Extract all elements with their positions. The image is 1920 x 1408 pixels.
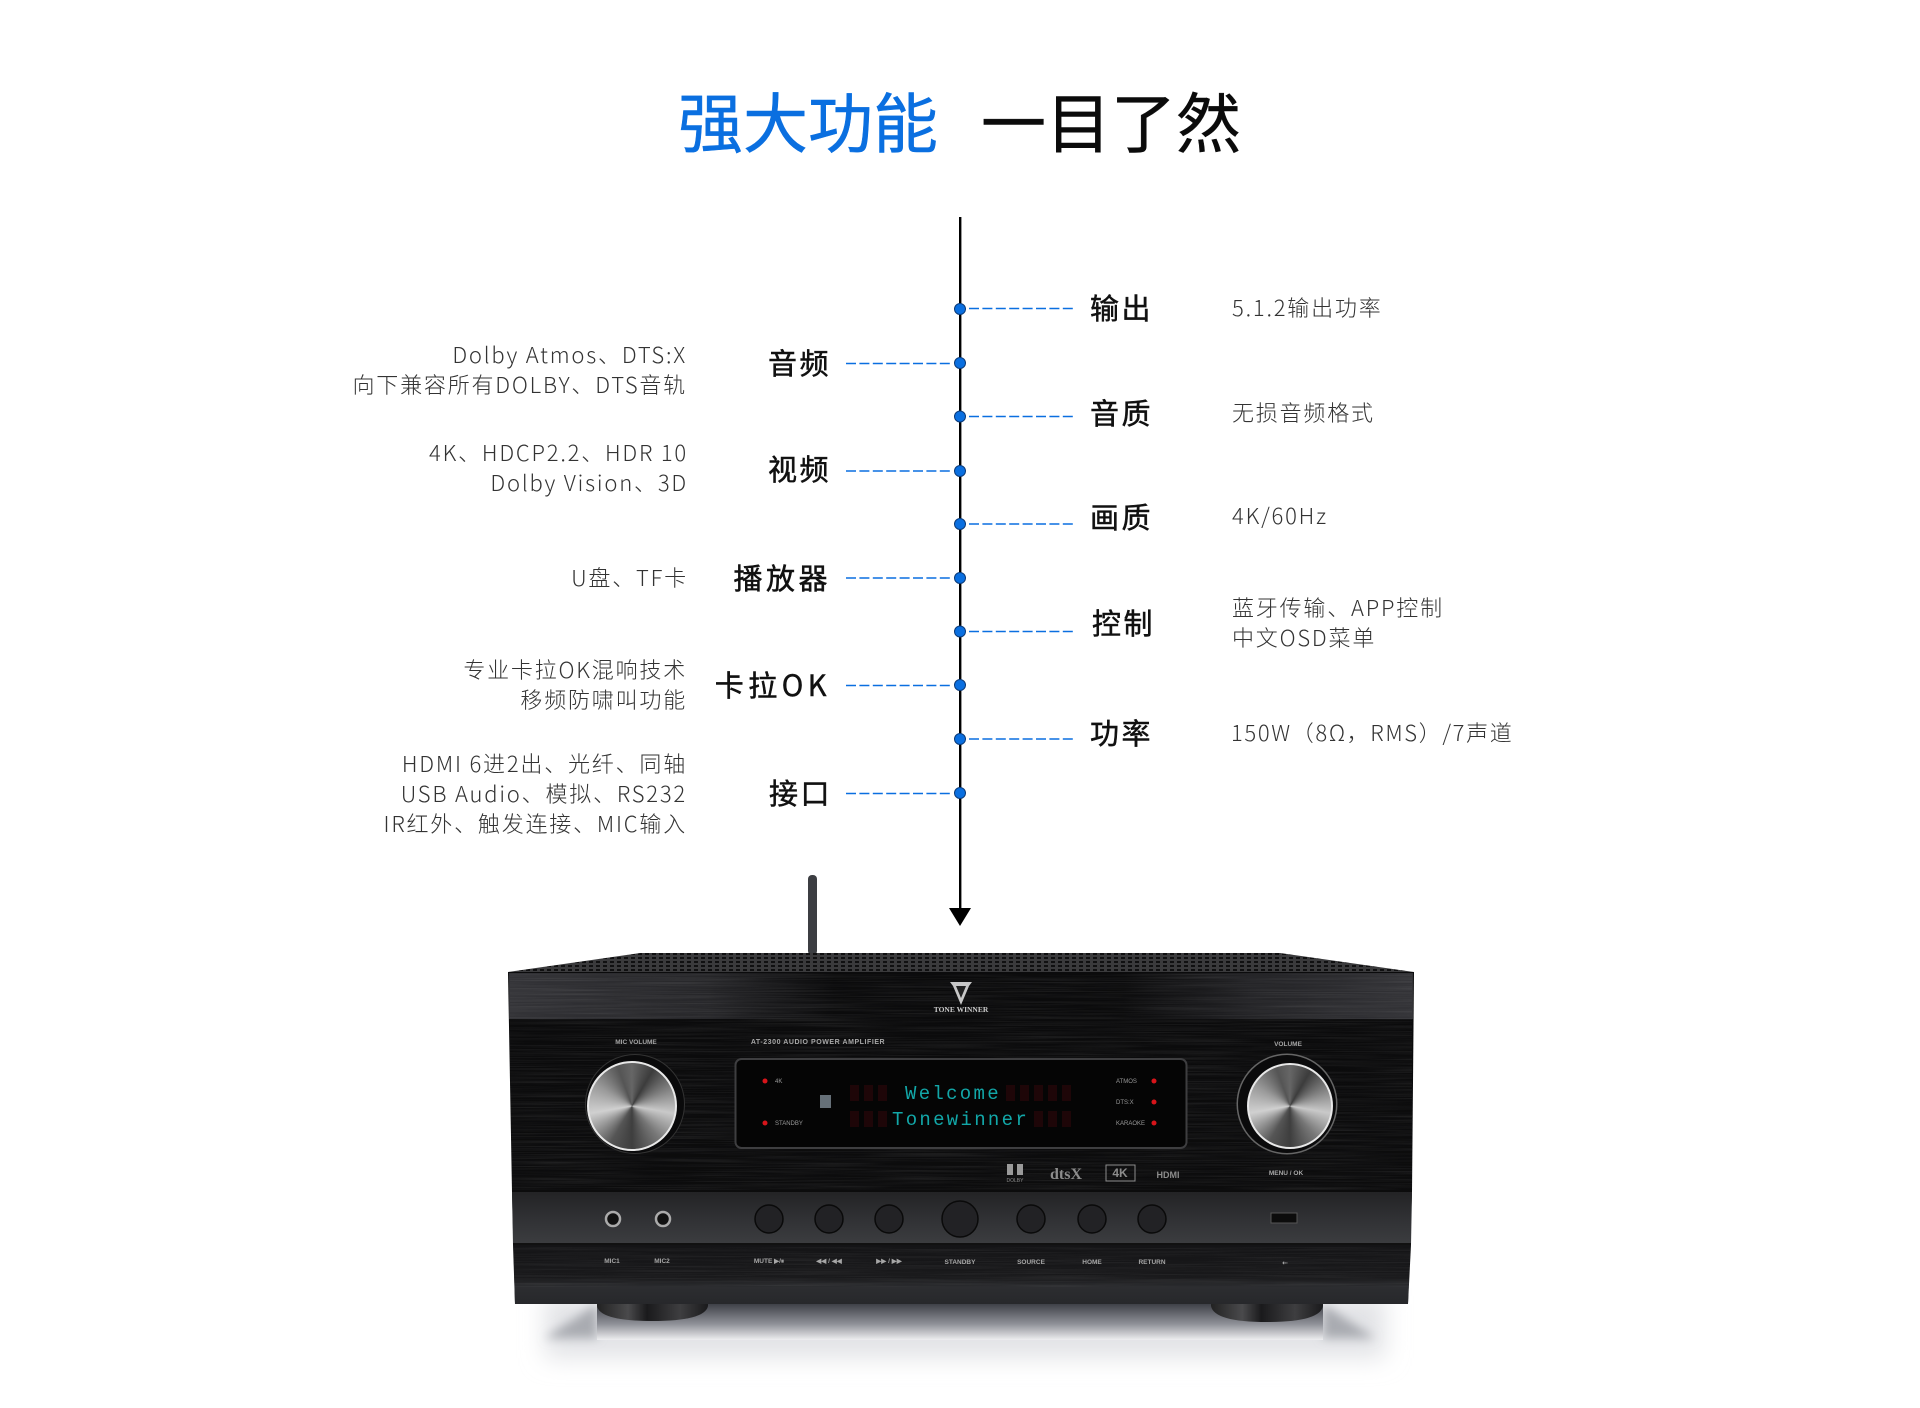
format logos: dtsX (1050, 1166, 1082, 1183)
indicator labels: STANDBY (775, 1121, 803, 1127)
timeline axis with arrow (949, 217, 971, 926)
display window (736, 1059, 1186, 1148)
left feature labels: 卡拉OK (715, 663, 831, 705)
amplifier top grille (508, 953, 1414, 972)
amplifier panel text: ⇠ (1282, 1260, 1288, 1267)
amplifier brand logo (934, 982, 989, 1014)
left descriptions: 向下兼容所有DOLBY、DTS音轨 (352, 368, 687, 400)
right feature labels: 输出 (1090, 286, 1153, 328)
title: 一目了然 (981, 72, 1241, 166)
left descriptions: 专业卡拉OK混响技术 (463, 653, 687, 685)
right descriptions (1231, 291, 1513, 748)
left descriptions: Dolby Vision、3D (490, 466, 688, 498)
display message: Welcome (905, 1083, 1001, 1105)
amplifier panel text (604, 1039, 1303, 1267)
right knob (1238, 1055, 1336, 1153)
amplifier panel text: AT-2300 AUDIO POWER AMPLIFIER (751, 1039, 885, 1046)
amplifier panel text: MIC1 (604, 1258, 620, 1265)
left feature labels: 视频 (768, 447, 831, 489)
indicator labels: KARAOKE (1116, 1121, 1145, 1127)
left knob (586, 1055, 684, 1153)
left descriptions: U盘、TF卡 (571, 561, 688, 593)
right feature labels: 控制 (1092, 601, 1155, 643)
left descriptions: 移频防啸叫功能 (520, 683, 687, 715)
amplifier panel text: MIC2 (654, 1258, 670, 1265)
amplifier front panel (508, 972, 1414, 1304)
left feature labels (715, 341, 832, 813)
format logos: DOLBY (1007, 1178, 1024, 1184)
floor reflection (545, 1296, 1385, 1358)
front buttons and jacks (606, 1201, 1166, 1237)
standby badge (820, 1095, 831, 1108)
usb port (1271, 1213, 1297, 1223)
format logos (1007, 1164, 1180, 1184)
right descriptions: 蓝牙传输、APP控制 (1232, 591, 1444, 623)
amplifier panel text: STANDBY (945, 1259, 976, 1266)
connector dots and dashes (846, 304, 1075, 798)
right descriptions: 150W（8Ω，RMS）/7声道 (1231, 716, 1513, 748)
right descriptions: 5.1.2输出功率 (1232, 291, 1383, 323)
amplifier feet (597, 1300, 1323, 1322)
left feature labels: 播放器 (733, 556, 831, 598)
right feature labels: 功率 (1090, 711, 1153, 753)
left descriptions: Dolby Atmos、DTS:X (452, 338, 687, 370)
amplifier panel text: VOLUME (1274, 1041, 1303, 1048)
amplifier antenna (808, 875, 817, 955)
amplifier panel text: ▶▶ / ▶▶ (875, 1258, 903, 1265)
right feature labels: 画质 (1090, 495, 1153, 537)
title: 强大功能 (678, 72, 938, 166)
left feature labels: 音频 (768, 341, 831, 383)
amplifier panel text: RETURN (1138, 1259, 1166, 1266)
indicator labels: 4K (775, 1079, 782, 1085)
display message: Tonewinner (892, 1109, 1029, 1131)
left descriptions: IR红外、触发连接、MIC输入 (384, 807, 687, 839)
dim dot-matrix blocks (850, 1085, 1071, 1127)
left descriptions (352, 338, 688, 839)
indicator labels: ATMOS (1116, 1079, 1137, 1085)
left feature labels: 接口 (769, 771, 832, 813)
left descriptions: USB Audio、模拟、RS232 (401, 777, 687, 809)
format logos: HDMI (1156, 1170, 1180, 1180)
right feature labels (1090, 286, 1155, 753)
right feature labels: 音质 (1090, 391, 1153, 433)
amplifier panel text: SOURCE (1017, 1259, 1046, 1266)
format logos: 4K (1112, 1166, 1128, 1180)
right descriptions: 4K/60Hz (1232, 499, 1328, 531)
amplifier brand logo: TONE WINNER (934, 1005, 989, 1014)
indicator labels: DTS:X (1116, 1100, 1134, 1106)
display message (892, 1083, 1029, 1131)
amplifier panel text: HOME (1082, 1259, 1102, 1266)
right descriptions: 无损音频格式 (1232, 396, 1375, 428)
amplifier panel text: MIC VOLUME (615, 1039, 657, 1046)
indicators (762, 1078, 1156, 1126)
left descriptions: HDMI 6进2出、光纤、同轴 (402, 747, 687, 779)
amplifier panel text: MUTE ▶/⏸ (754, 1258, 784, 1265)
right descriptions: 中文OSD菜单 (1232, 621, 1376, 653)
title (678, 72, 1241, 166)
indicator labels (775, 1079, 1145, 1127)
amplifier panel text: ◀◀ / ◀◀ (815, 1258, 843, 1265)
amplifier panel text: MENU / OK (1269, 1170, 1303, 1177)
left descriptions: 4K、HDCP2.2、HDR 10 (429, 436, 688, 468)
